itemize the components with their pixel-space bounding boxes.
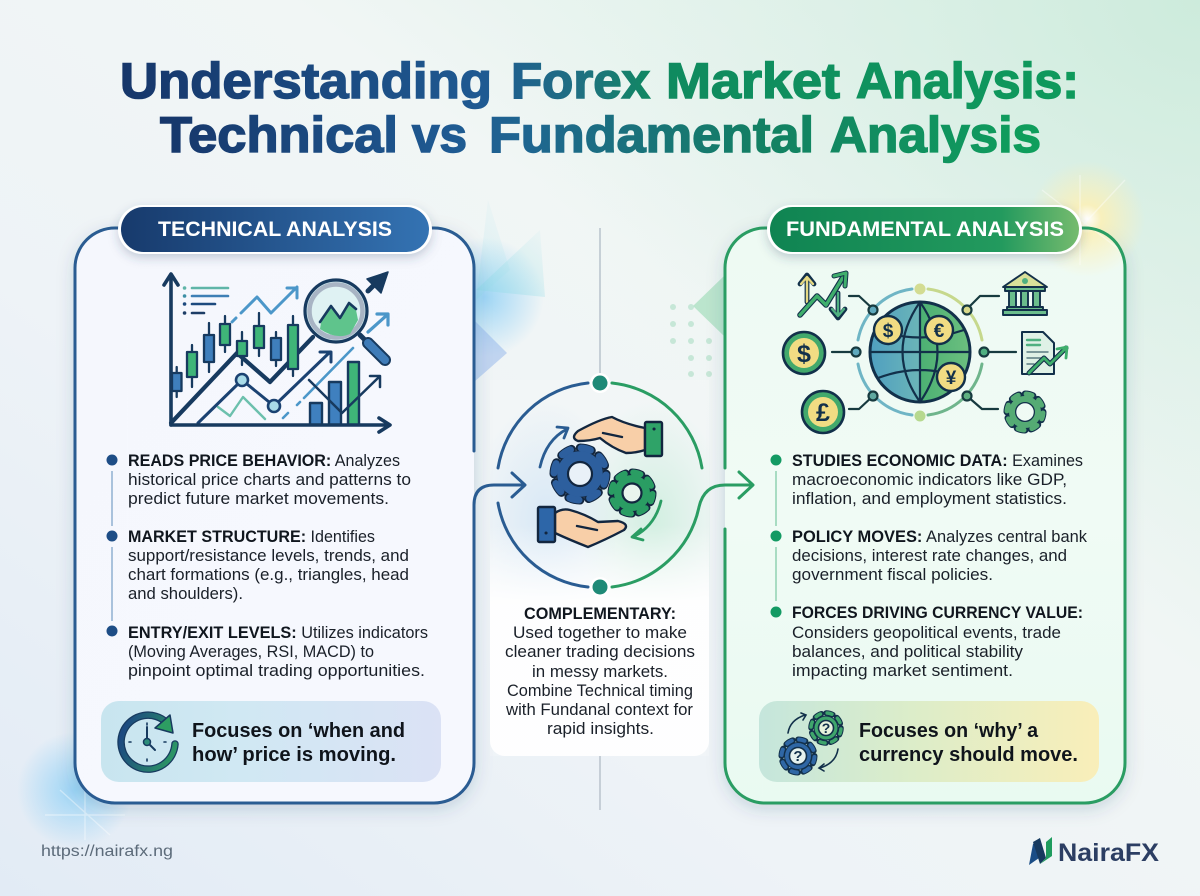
callout: why a currency should move bbox=[759, 701, 1099, 782]
pound coin: £ bbox=[816, 399, 830, 427]
bullet: market structure: and shoulders). bbox=[128, 585, 243, 603]
bullet: studies economic data: macroeconomic indicators like GDP, bbox=[792, 471, 1067, 489]
decorative green triangle and dots bbox=[670, 276, 724, 377]
list connectors bbox=[775, 471, 777, 601]
ring nodes bbox=[852, 306, 988, 400]
title: Analysis bbox=[830, 107, 1041, 163]
bullet list: fundamental bbox=[770, 452, 1088, 680]
callout: when and how: Focuses on ‘when and bbox=[192, 719, 405, 742]
title: vs bbox=[412, 107, 467, 163]
report document bbox=[1022, 332, 1067, 374]
magnifier bbox=[305, 280, 385, 360]
heading pill: FUNDAMENTAL ANALYSIS bbox=[786, 218, 1064, 241]
title: Technical bbox=[160, 107, 398, 163]
title: Understanding bbox=[120, 53, 492, 109]
callout: when and how bbox=[101, 701, 441, 782]
bullet: entry/exit levels: pinpoint optimal trading opportunities. bbox=[128, 662, 425, 680]
green gear bbox=[612, 472, 652, 514]
text card: COMPLEMENTARY: bbox=[524, 605, 676, 623]
dollar coin bbox=[783, 332, 825, 374]
globe bbox=[870, 302, 970, 402]
dashed blue line and arrows bbox=[283, 348, 353, 418]
title: Fundamental bbox=[489, 107, 814, 163]
icon: question gears bbox=[782, 713, 841, 772]
brand logo bbox=[1029, 837, 1159, 867]
bullet: market structure: support/resistance levels, trends, and bbox=[128, 547, 409, 565]
axes bbox=[164, 274, 178, 425]
cycle arrows bbox=[540, 427, 568, 467]
bullet list: technical bbox=[106, 452, 428, 680]
blue gear bbox=[554, 448, 606, 500]
icon: globe network: € bbox=[934, 321, 945, 342]
bullet: entry/exit levels: (Moving Averages, RSI, MACD) to bbox=[128, 643, 374, 661]
icon: hands and gears bbox=[538, 417, 662, 547]
bank bbox=[1003, 272, 1047, 315]
light trend arrow bbox=[232, 287, 297, 322]
text card: with Fundanal context for bbox=[505, 701, 694, 719]
bullet: policy moves: POLICY MOVES: Analyzes central bank bbox=[792, 528, 1088, 546]
list connectors bbox=[111, 471, 113, 621]
bullet: studies economic data bbox=[770, 452, 1083, 508]
icon: globe network bbox=[783, 272, 1067, 433]
bottom hand bbox=[538, 507, 626, 547]
bullet: studies economic data: inflation, and employment statistics. bbox=[792, 490, 1067, 508]
panel: fundamental analysis bbox=[725, 161, 1145, 803]
footer url: https://nairafx.ng bbox=[41, 843, 173, 860]
text card: in messy markets. bbox=[532, 663, 668, 681]
bullet: market structure: chart formations (e.g., triangles, head bbox=[128, 566, 409, 584]
panel: technical analysis bbox=[75, 205, 525, 803]
teal zigzag bbox=[218, 397, 265, 419]
brand logo: NairaFX bbox=[1058, 839, 1159, 867]
text card bbox=[490, 525, 709, 756]
title: Analysis: bbox=[856, 53, 1079, 109]
gear bbox=[1007, 394, 1043, 430]
text card: rapid insights. bbox=[547, 720, 654, 738]
callout: why a currency should move: Focuses on ‘why’ a bbox=[859, 719, 1039, 742]
connector ring bbox=[858, 289, 912, 340]
text card: Used together to make bbox=[513, 624, 687, 642]
bullet: reads price behavior bbox=[106, 452, 411, 508]
decorative centre band bbox=[490, 380, 710, 756]
decorative yellow glow bbox=[1029, 161, 1145, 277]
bullet: forces driving currency value: Considers geopolitical events, trade bbox=[792, 624, 1061, 642]
bullet: forces driving currency value: FORCES DRIVING CURRENCY VALUE: bbox=[792, 604, 1083, 622]
dollar coin: $ bbox=[797, 340, 811, 368]
ring nodes bbox=[590, 373, 610, 597]
title bbox=[120, 53, 1079, 163]
currency coins bbox=[874, 316, 965, 391]
decorative blue burst top bbox=[424, 200, 545, 382]
candlesticks bbox=[172, 313, 298, 397]
panel outline bbox=[75, 228, 525, 803]
callout: why a currency should move: currency should move. bbox=[859, 743, 1078, 766]
pound coin bbox=[802, 391, 844, 433]
icon: clock bbox=[121, 715, 175, 769]
icon: question gears: ? bbox=[822, 720, 830, 736]
panel: complementary bbox=[490, 373, 753, 756]
heading pill bbox=[767, 205, 1082, 254]
icon: globe network: $ bbox=[883, 321, 894, 342]
logo mark bbox=[1029, 837, 1052, 865]
bullet: policy moves: government fiscal policies. bbox=[792, 566, 993, 584]
heading pill bbox=[118, 205, 432, 254]
heading pill: TECHNICAL ANALYSIS bbox=[158, 218, 392, 241]
title: Market bbox=[666, 53, 840, 109]
bullet: forces driving currency value bbox=[770, 604, 1083, 680]
title: Forex bbox=[511, 53, 650, 109]
bullet: reads price behavior: historical price charts and patterns to bbox=[128, 471, 411, 489]
text card: cleaner trading decisions bbox=[505, 643, 695, 661]
top hand bbox=[574, 417, 662, 456]
bullet: reads price behavior: READS PRICE BEHAVIOR: Analyzes bbox=[128, 452, 400, 470]
bullet: entry/exit levels bbox=[106, 624, 428, 680]
bullet: policy moves bbox=[770, 528, 1088, 584]
chart legend lines bbox=[184, 288, 228, 313]
icon: price chart bbox=[164, 272, 390, 432]
decorative centre vertical line bbox=[599, 228, 601, 810]
panel outline bbox=[725, 228, 1125, 803]
callout: when and how: how’ price is moving. bbox=[192, 743, 396, 766]
second trend line bbox=[198, 352, 331, 423]
trend arrows bbox=[800, 273, 846, 318]
bullet: market structure: MARKET STRUCTURE: Identifies bbox=[128, 528, 375, 546]
panel background bbox=[75, 228, 474, 803]
decorative blue glow bottom left bbox=[17, 732, 133, 848]
icon: globe network: ¥ bbox=[946, 368, 957, 389]
main trend line bbox=[171, 337, 313, 423]
panel background bbox=[725, 228, 1125, 803]
text card: Combine Technical timing bbox=[507, 682, 693, 700]
icon: question gears: ? bbox=[793, 748, 803, 765]
bullet: market structure bbox=[106, 528, 409, 603]
bars bbox=[310, 362, 359, 425]
bullet: studies economic data: STUDIES ECONOMIC DATA: Examines bbox=[792, 452, 1083, 470]
cycle ring bbox=[498, 383, 753, 587]
bullet: entry/exit levels: ENTRY/EXIT LEVELS: Utilizes indicators bbox=[128, 624, 428, 642]
bullet: reads price behavior: predict future market movements. bbox=[128, 490, 389, 508]
bullet: forces driving currency value: balances, and political stability bbox=[792, 643, 1024, 661]
connectors bbox=[832, 296, 1016, 409]
bullet: policy moves: decisions, interest rate changes, and bbox=[792, 547, 1067, 565]
bullet: forces driving currency value: impacting market sentiment. bbox=[792, 662, 1013, 680]
